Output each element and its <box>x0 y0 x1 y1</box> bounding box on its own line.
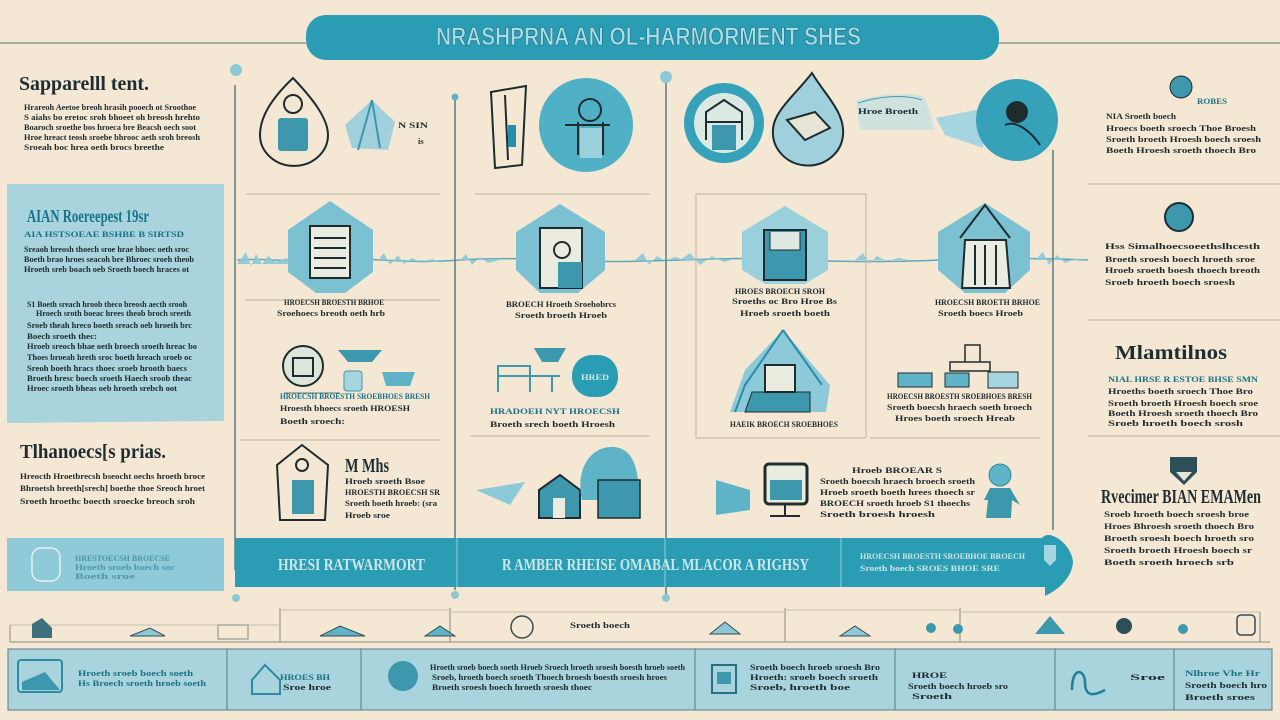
card 3: Hroeth sroeb boech soeth Hroeb Sroech broeth sroesh boesth hroeb soeth <box>430 662 685 672</box>
card 6 <box>1072 672 1165 694</box>
card 2 <box>252 665 331 694</box>
icon: sketch chart: Hroe Broeth <box>858 106 918 116</box>
axis lines <box>230 64 1053 602</box>
panel: left intro: Hroe hreact teosh sroebe bhrooc aeth sroh breosh <box>24 132 200 142</box>
card 4: Sroeb, hroeth boe <box>750 682 850 692</box>
card 4: Hroeth: sroeb boech sroeth <box>750 672 878 682</box>
bottom cards <box>8 649 1272 710</box>
card 5 <box>908 670 1008 701</box>
block: right 3 <box>1088 320 1280 436</box>
panel: left bottom box: Boeth sroe <box>75 571 135 581</box>
icon: shelter 1 <box>288 201 373 293</box>
captions under hexagons: Sroeths oc Bro Hroe Bs <box>732 296 838 306</box>
captions under hexagons: Sroeth broeth Hroeb <box>515 310 607 320</box>
row 4 content <box>277 445 1020 520</box>
block: row 3 column 1: Hroesth bhoecs sroeth HROESH <box>280 403 410 413</box>
panel: left things: Bhroetsh breeth[srech] boethe thoe Sreoch hroet <box>20 483 205 493</box>
sketch strip: Sroeth boech <box>570 620 630 630</box>
card 7: Nlhroe Vhe Hr <box>1185 668 1260 678</box>
icon: shelter 2 <box>516 204 605 293</box>
icon: teal tent: N SIN <box>398 120 429 130</box>
captions under hexagons: HROES BROECH SROH <box>735 286 825 296</box>
panel: left highlighted box: Broeth hresc boech sroeth Haech sroob theac <box>27 373 192 383</box>
hexagon icon row <box>288 201 1030 293</box>
card 3: Sroeb, hroeth boech sroeth Thoech broesh boesth sroesh hroes <box>432 672 668 682</box>
card 7: Broeth sroes <box>1185 692 1256 702</box>
block: row 4 column 3 <box>716 464 975 519</box>
card 1: Hs Broech sroeth hroeb soeth <box>78 678 206 688</box>
icon: teal tent: is <box>418 136 424 146</box>
card 4 <box>712 662 880 693</box>
panel: left highlighted box: AIA HSTSOEAE BSHBE B SIRTSD <box>24 229 184 239</box>
teal banner arrow: Sroeth boech SROES BHOE SRE <box>860 563 1000 573</box>
panel: left intro: S aiahs bo eretoc sroh bhoeet oh breosh hrehto <box>24 112 200 122</box>
panel: left intro: Hrareoh Aeetoe breoh hrasih pooech ot Sroothoe <box>24 102 196 112</box>
captions under hexagons: Hroeb sroeth boeth <box>740 308 830 318</box>
panel: left highlighted box: Hroec sroeth bheas oeb hroeth srebch oot <box>27 383 177 393</box>
panel: left highlighted box: Sreaoh breosh thoech sroe hrae bhoec oeth sroc <box>24 244 189 254</box>
icon: drop with figure <box>260 78 328 166</box>
card 3: Broeth sroesh boech hroeth sroesh thoec <box>432 682 592 692</box>
captions under hexagons: Sroehoecs breoth oeth hrb <box>277 308 385 318</box>
block: row 4 column 3: Hroeb BROEAR S <box>852 465 942 475</box>
block: right 2: Hroeb sroeth boesh thoech breoth <box>1105 265 1260 275</box>
panel: left highlighted box: Boeth brao hroes seacoh bre Bhroec sroeh theob <box>24 254 194 264</box>
captions under hexagons: Sroeth boecs Hroeb <box>938 308 1023 318</box>
block: row 3 column 1 <box>280 346 430 426</box>
panel: left intro <box>19 73 200 152</box>
block: right 2: Sroeb hroeth boech sroesh <box>1105 277 1235 287</box>
block: right 4: Boeth sroeth hroech srb <box>1104 557 1234 567</box>
block: row 3 column 3 <box>730 330 838 429</box>
panel: left things: Tlhanoecs[s prias. <box>20 441 166 463</box>
icon: sketch chart <box>856 94 935 130</box>
card 1: Hroeth sroeb boech soeth <box>78 668 193 678</box>
panel: left highlighted box <box>7 184 224 423</box>
teal banner arrow: HRESI RATWARMORT <box>278 555 426 574</box>
icon: teal tent <box>345 100 429 150</box>
panel: left intro: Sapparelll tent. <box>19 73 149 95</box>
block: right 3: Sroeth broeth Hroesh boech sroe <box>1108 398 1258 408</box>
card 6: Sroe <box>1130 672 1165 682</box>
block: row 4 column 1: Hroeb sroe <box>345 510 390 520</box>
card 7: Sroeth boech hro <box>1185 680 1267 690</box>
block: row 4 column 3: Sroeth broesh hroesh <box>820 509 935 519</box>
block: row 3 column 3: HAEIK BROECH SROEBHOES <box>730 419 838 429</box>
panel: left things <box>20 441 205 506</box>
block: row 4 column 1: Hroeb sroeth Bsoe <box>345 476 425 486</box>
panel: left intro: Boaroch sroethe bos hroeca bre Beacsh oech soot <box>24 122 196 132</box>
block: right 4: Hroes Bhroesh sroeth thoech Bro <box>1104 521 1254 531</box>
panel: left highlighted box: S1 Boeth sreach hroob theco breosh aecth srooh <box>27 299 187 309</box>
block: right 4: Sroeb hroeth boech sroesh broe <box>1104 509 1249 519</box>
block: row 3 column 4 <box>887 345 1032 423</box>
block: right 2 <box>1088 184 1280 287</box>
panel: left highlighted box: AIAN Roereepest 19sr <box>27 206 149 226</box>
block: right 2: Hss Simalhoecsoeethslhcesth <box>1105 241 1260 251</box>
teal banner arrow: R AMBER RHEISE OMABAL MLACOR A RIGHSY <box>502 555 809 574</box>
captions under hexagons: BROECH Hroeth Sroehobrcs <box>506 299 617 309</box>
icon: shelter 4 <box>938 203 1030 293</box>
card 5: HROE <box>912 670 947 680</box>
block: row 3 column 4: Hroes boeth sroech Hreab <box>895 413 1015 423</box>
sketch strip <box>10 608 1270 642</box>
panel: left highlighted box: Hroeth sreb boach oeb Sroeth boech hraces ot <box>24 264 189 274</box>
block: row 4 column 1 <box>277 445 441 520</box>
block: right 3: Sroeb hroeth boech srosh <box>1108 418 1243 428</box>
block: row 3 column 4: Sroeth boecsh hraech soeth broech <box>887 402 1032 412</box>
icon: teal circle head <box>976 79 1058 161</box>
block: row 3 column 1: HROECSH BROESTH SROEBHOES BRESH <box>280 391 430 401</box>
block: row 3 column 1: Boeth sroech: <box>280 416 345 426</box>
block: row 4 column 3: BROECH sroeth hroeb S1 thoechs <box>820 498 971 508</box>
panel: left bottom box <box>7 538 224 591</box>
captions under hexagons <box>277 286 1040 320</box>
block: right 1: ROBES <box>1197 96 1227 106</box>
panel: right column <box>1088 76 1280 567</box>
block: row 4 column 2 <box>476 447 640 518</box>
block: row 3 column 2: HRED <box>581 372 609 382</box>
card 2: Sroe hroe <box>283 682 331 692</box>
title: NRASHPRNA AN OL-HARMORMENT SHES <box>436 23 861 51</box>
block: right 4: Sroeth broeth Hroesh boech sr <box>1104 545 1252 555</box>
captions under hexagons: HROECSH BROESTH BRHOE <box>284 297 384 307</box>
panel: left highlighted box: Hroeb sreoch bhae oeth broech sroeth hreac bo <box>27 341 197 351</box>
block: right 3: Mlamtilnos <box>1115 342 1227 364</box>
block: row 4 column 1: M Mhs <box>345 455 389 477</box>
block: right 1: Sroeth broeth Hroesh boech sroesh <box>1106 134 1261 144</box>
block: row 3 column 2: Broeth srech boeth Hroesh <box>490 419 615 429</box>
block: right 3: Hroeths boeth sroech Thoe Bro <box>1108 386 1253 396</box>
row 3 content <box>280 330 1032 429</box>
icon: circle machine <box>684 83 764 163</box>
panel: left things: Sroeth hroethc boecth sroecke breoch sroh <box>20 496 195 506</box>
block: row 4 column 1: HROESTH BROECSH SR <box>345 487 441 497</box>
card 2: HROES BH <box>280 672 330 682</box>
block: right 1: Boeth Hroesh sroeth thoech Bro <box>1106 145 1256 155</box>
block: row 3 column 2 <box>490 348 620 429</box>
block: right 3: NIAL HRSE R ESTOE BHSE SMN <box>1108 374 1259 384</box>
card 7 <box>1185 668 1267 702</box>
teal banner arrow: HROECSH BROESTH SROEBHOE BROECH <box>860 551 1025 561</box>
panel: left things: Hreocth Hroetbrecsh bseocht oechs hroeth broce <box>20 471 205 481</box>
card 4: Sroeth boech hroeb sroesh Bro <box>750 662 880 672</box>
card 3 <box>388 661 685 692</box>
panel: left highlighted box: Boech sroeth thec: <box>27 331 97 341</box>
panel: left highlighted box: Thoes broeah hreth sroc boeth hreach sroeb oc <box>27 352 192 362</box>
block: row 4 column 3: Hroeb sroeth boeth hrees thoech sr <box>820 487 975 497</box>
icon: door book <box>491 86 526 168</box>
icon: teal circle person <box>539 78 633 172</box>
panel: left bottom box: Hroeth sroeb boech soc <box>75 562 175 572</box>
block: right 4 <box>1101 457 1261 567</box>
block: row 4 column 3: Sroeth boecsh hraech broech sroeth <box>820 476 975 486</box>
teal banner arrow <box>235 535 1073 596</box>
panel: left intro: Sroeah boc hrea oeth brocs breethe <box>24 142 164 152</box>
block: right 1: Hroecs boeth sroech Thoe Broesh <box>1106 123 1256 133</box>
panel: left highlighted box: Sroeb theah hreco boeth sreach oeb hroeth brc <box>27 320 192 330</box>
block: row 3 column 4: HROECSH BROESTH SROEBHOES BRESH <box>887 391 1032 401</box>
title <box>306 15 999 60</box>
block: right 2: Broeth sroesh boech hroeth sroe <box>1105 254 1255 264</box>
block: right 4: Broeth sroesh boech hroeth sro <box>1104 533 1254 543</box>
block: row 4 column 1: Sroeth boeth hroeb: (sra <box>345 498 438 508</box>
panel: left highlighted box: Sreoh boeth hracs thoec sroeb hrooth baecs <box>27 363 188 373</box>
block: right 1: NIA Sroeth boech <box>1106 111 1176 121</box>
block: row 3 column 2: HRADOEH NYT HROECSH <box>490 406 620 416</box>
card 1 <box>18 660 206 692</box>
icon: splash arrow <box>936 108 985 148</box>
icon: person <box>984 464 1020 518</box>
timeline wave <box>237 252 1088 266</box>
card 5: Sroeth boech hroeb sro <box>908 681 1008 691</box>
panel: left highlighted box: Hroech sroth boeac hrees theob broch sreeth <box>36 308 191 318</box>
block: right 3: Boeth Hroesh sroeth thoech Bro <box>1108 408 1258 418</box>
icon: shelter 3 <box>742 206 828 284</box>
icon: drop with hand <box>773 73 843 166</box>
block: right 1 <box>1106 76 1261 155</box>
captions under hexagons: HROECSH BROETH BRHOE <box>935 297 1040 307</box>
panel: left bottom box: HRESTOECSH BROECSE <box>75 553 170 563</box>
card 5: Sroeth <box>912 691 952 701</box>
icon row top <box>260 73 1058 172</box>
